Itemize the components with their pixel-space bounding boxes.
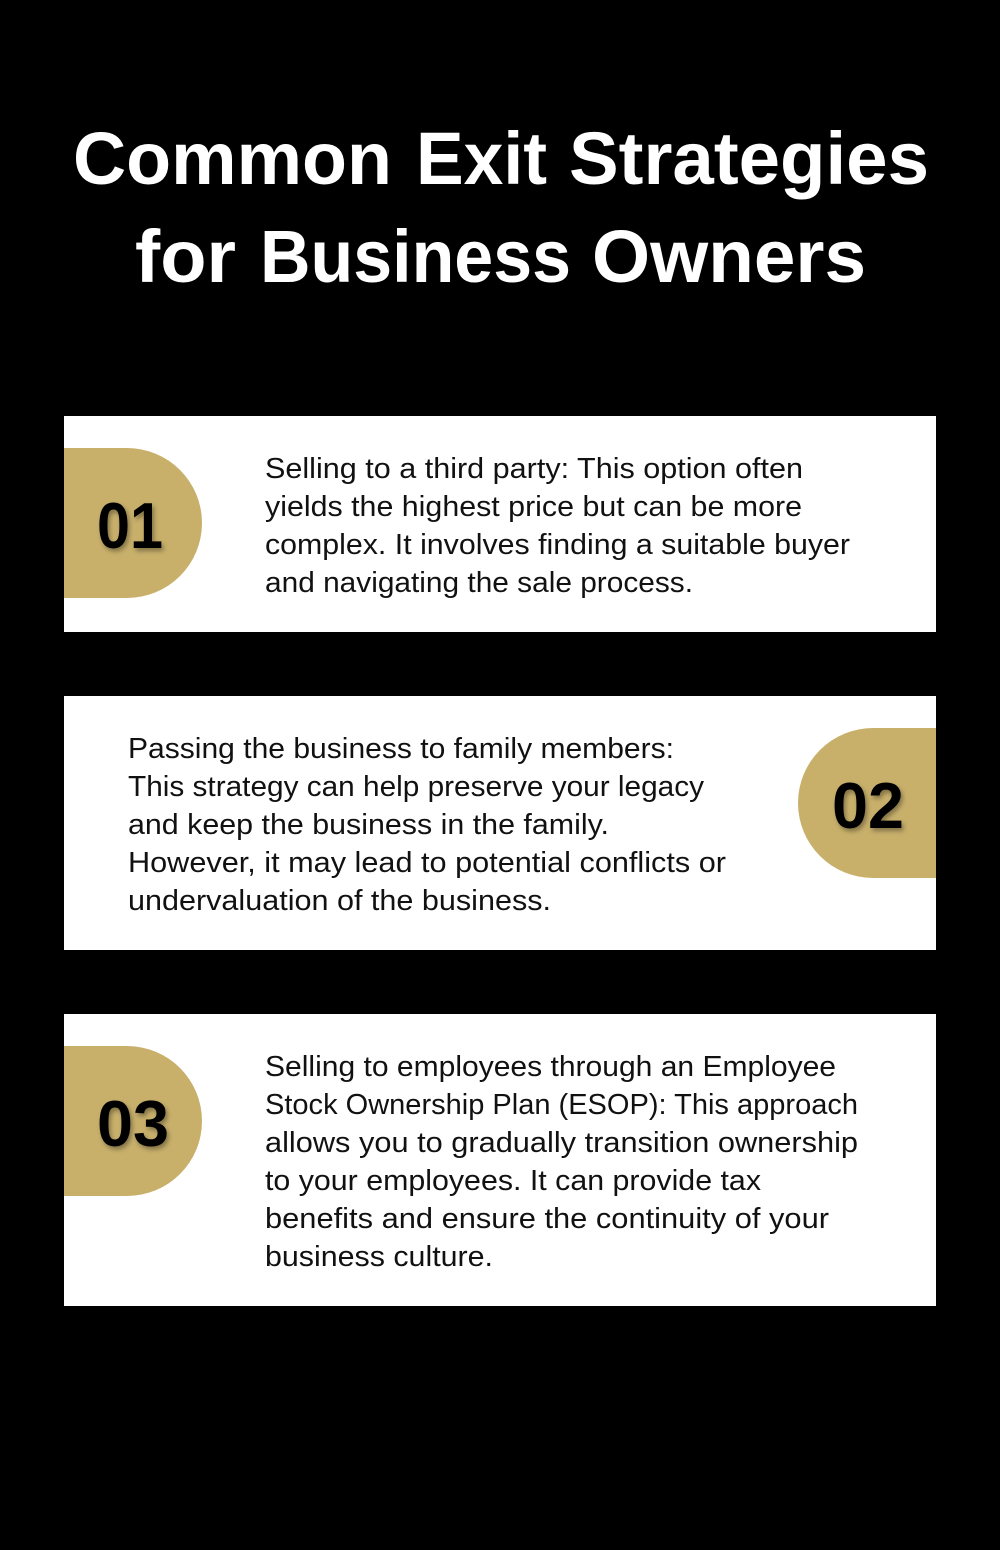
text: passing to family: This strategy can help preserve your legacy	[128, 771, 705, 803]
text: passing to family: However, it may lead to potential conflicts or	[128, 847, 726, 879]
text: passing to family: and keep the business in the family.	[128, 809, 609, 841]
text: employee stock ownership plan: benefits and ensure the continuity of your	[265, 1203, 829, 1235]
text: employee stock ownership plan: Selling to employees through an Employee	[265, 1051, 836, 1083]
text: employee stock ownership plan: business culture.	[265, 1241, 493, 1273]
text: selling to a third party	[265, 453, 850, 599]
text: passing to family	[128, 733, 726, 917]
title: Exit	[416, 117, 547, 200]
text: employee stock ownership plan	[265, 1051, 858, 1273]
text: passing to family: Passing the business to family members:	[128, 733, 674, 765]
text: employee stock ownership plan: Stock Ownership Plan (ESOP): This approach	[265, 1089, 858, 1121]
panel: strategy 02	[64, 696, 936, 950]
badge: 03: 03	[97, 1087, 169, 1160]
title: Owners	[592, 215, 866, 298]
title: Common	[73, 117, 392, 200]
text: passing to family: undervaluation of the business.	[128, 885, 551, 917]
text: selling to a third party: yields the highest price but can be more	[265, 491, 802, 523]
badge: 02: 02	[832, 769, 904, 842]
title: for	[135, 215, 236, 298]
text: selling to a third party: Selling to a third party: This option often	[265, 453, 803, 485]
panel: strategy 01	[64, 416, 936, 632]
text: employee stock ownership plan: allows you to gradually transition ownership	[265, 1127, 858, 1159]
text: selling to a third party: and navigating the sale process.	[265, 567, 693, 599]
badge: 01: 01	[97, 489, 163, 562]
badge: 03	[64, 1046, 202, 1196]
badge: 02	[798, 728, 936, 878]
badge: 01	[64, 448, 202, 598]
title: Strategies	[569, 117, 929, 200]
text: selling to a third party: complex. It involves finding a suitable buyer	[265, 529, 850, 561]
title	[73, 117, 929, 298]
panel: strategy 03	[64, 1014, 936, 1306]
title: Business	[260, 215, 571, 298]
text: employee stock ownership plan: to your employees. It can provide tax	[265, 1165, 762, 1197]
